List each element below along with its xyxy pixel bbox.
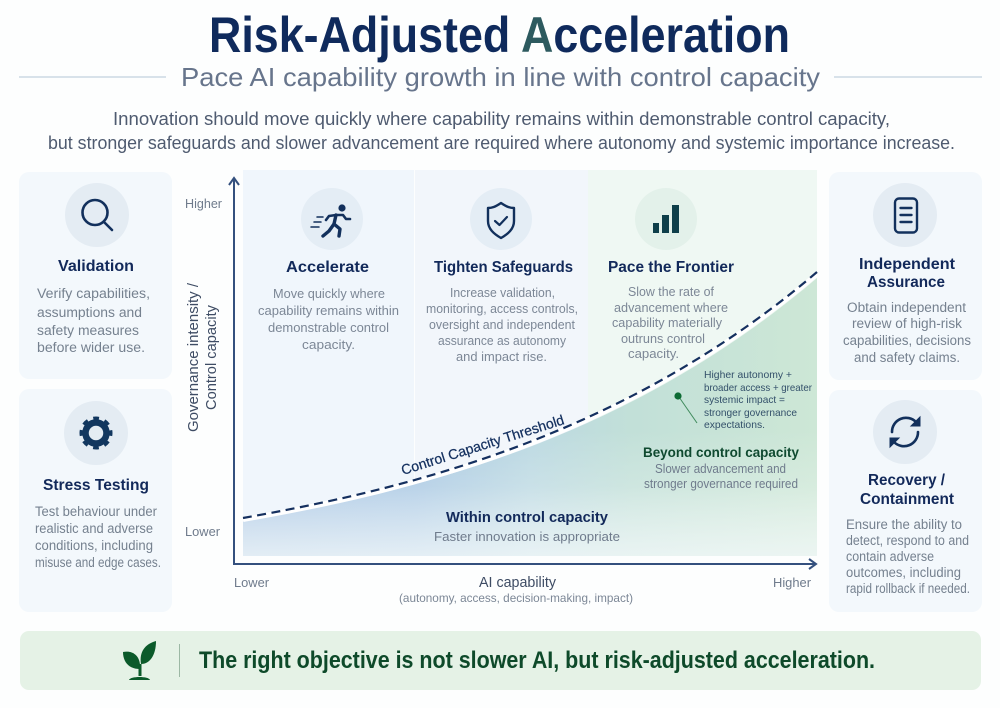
- heading: recovery / containment: [860, 472, 955, 508]
- label: within control capacity: Faster innovation is appropriate: [434, 530, 620, 544]
- text: stress testing body: conditions, including: [35, 538, 153, 553]
- heading: accelerate: Accelerate: [286, 259, 369, 276]
- callout: stronger governance: stronger governance: [704, 407, 797, 419]
- x axis labels: Lower: [234, 576, 269, 590]
- text: independent assurance body: [843, 300, 971, 365]
- x axis labels: [234, 576, 811, 590]
- heading: pace the frontier: Pace the Frontier: [608, 259, 734, 276]
- text: tighten safeguards body: oversight and independent: [429, 317, 575, 332]
- area under threshold: [243, 278, 817, 556]
- chart: control capacity threshold: [185, 170, 817, 605]
- threshold curve: [243, 272, 817, 520]
- subtitle: Pace AI capability growth in line with control capacity: [181, 62, 820, 92]
- heading: recovery / containment: Containment: [860, 491, 955, 508]
- x axis labels: Higher: [773, 576, 811, 590]
- text: independent assurance body: Obtain independent: [847, 300, 966, 315]
- text: accelerate body: capacity.: [302, 337, 355, 352]
- icon: refresh: [890, 417, 920, 447]
- label: beyond control capacity: Slower advancement and: [655, 462, 786, 476]
- callout: stronger governance: broader access + greater: [704, 382, 812, 394]
- label: beyond control capacity: Beyond control capacity: [643, 444, 799, 460]
- text: stress testing body: misuse and edge cases.: [35, 555, 161, 570]
- panel: independent assurance: [829, 172, 982, 380]
- zone: accelerate: [258, 188, 399, 352]
- text: validation body: Verify capabilities,: [37, 286, 150, 301]
- zone: pace the frontier: [608, 188, 734, 361]
- heading: independent assurance: Assurance: [867, 274, 945, 291]
- text: accelerate body: capability remains within: [258, 303, 399, 318]
- y axis: [229, 178, 239, 564]
- text: independent assurance body: and safety claims.: [854, 350, 960, 365]
- heading: validation: Validation: [58, 258, 134, 275]
- intro text: but stronger safeguards and slower advancement are required where autonomy and systemic importance increase.: [48, 133, 955, 153]
- text: accelerate body: demonstrable control: [268, 320, 389, 335]
- y axis title: Governance intensity /: [186, 282, 202, 432]
- text: validation body: [37, 286, 150, 355]
- text: tighten safeguards body: Increase validation,: [450, 285, 555, 300]
- label: within control capacity: Within control capacity: [446, 510, 608, 526]
- callout: stronger governance: [674, 369, 812, 431]
- x axis title: AI capability: [479, 575, 557, 591]
- text: stress testing body: [35, 504, 161, 570]
- title: Risk-Adjusted Acceleration: [209, 7, 790, 63]
- intro text: [48, 109, 955, 153]
- text: pace the frontier body: capability materially: [612, 315, 722, 330]
- text: pace the frontier body: advancement where: [614, 300, 728, 315]
- text: recovery body: [846, 517, 970, 596]
- text: tighten safeguards body: [426, 285, 578, 364]
- text: stress testing body: realistic and adverse: [35, 521, 153, 536]
- icon: runner: [311, 204, 350, 236]
- text: stress testing body: Test behaviour under: [35, 504, 157, 519]
- x axis title: [399, 575, 633, 605]
- text: independent assurance body: capabilities, decisions: [843, 333, 971, 348]
- panel: recovery / containment: [829, 390, 982, 612]
- panel: zone backgrounds: [243, 170, 817, 556]
- text: pace the frontier body: outruns control: [621, 331, 705, 346]
- icon: bars: [653, 205, 679, 233]
- icon: document: [895, 198, 917, 232]
- banner: conclusion: [20, 631, 981, 690]
- icon: shield: [488, 203, 514, 238]
- heading: independent assurance: [859, 256, 956, 291]
- text: pace the frontier body: Slow the rate of: [628, 284, 714, 299]
- text: recovery body: rapid rollback if needed.: [846, 581, 970, 596]
- text: recovery body: outcomes, including: [846, 565, 961, 580]
- label: beyond control capacity: stronger governance required: [644, 477, 798, 491]
- heading: independent assurance: Independent: [859, 256, 956, 273]
- text: independent assurance body: review of high-risk: [852, 316, 962, 331]
- text: recovery body: Ensure the ability to: [846, 517, 962, 532]
- y axis labels: [185, 197, 222, 539]
- text: validation body: before wider use.: [37, 340, 145, 355]
- icon: seedling: [123, 641, 156, 680]
- icon: gear: [82, 418, 110, 448]
- heading: tighten safeguards: Tighten Safeguards: [434, 259, 573, 276]
- text: conclusion: The right objective is not slower AI, but risk-adjusted acceleration.: [199, 647, 875, 674]
- zone: tighten safeguards: [426, 188, 578, 364]
- text: tighten safeguards body: assurance as autonomy: [438, 333, 566, 348]
- text: pace the frontier body: capacity.: [628, 346, 679, 361]
- text: recovery body: contain adverse: [846, 549, 934, 564]
- callout: stronger governance: systemic impact =: [704, 394, 785, 406]
- text: validation body: safety measures: [37, 323, 139, 338]
- y axis labels: Higher: [185, 197, 222, 211]
- threshold label: Control Capacity Threshold: [399, 411, 566, 478]
- intro text: Innovation should move quickly where capability remains within demonstrable control capacity,: [113, 109, 890, 129]
- y axis labels: Lower: [185, 525, 220, 539]
- text: pace the frontier body: [612, 284, 728, 361]
- callout: stronger governance: Higher autonomy +: [704, 369, 792, 381]
- label: within control capacity: [434, 510, 620, 544]
- label: beyond control capacity: [643, 444, 799, 491]
- text: accelerate body: [258, 286, 399, 352]
- text: validation body: assumptions and: [37, 305, 142, 320]
- text: tighten safeguards body: and impact rise.: [456, 349, 547, 364]
- panel: validation: [19, 172, 172, 379]
- text: accelerate body: Move quickly where: [273, 286, 385, 301]
- heading: recovery / containment: Recovery /: [868, 472, 946, 489]
- text: recovery body: detect, respond to and: [846, 533, 969, 548]
- icon: magnifier: [82, 200, 112, 230]
- x axis title: (autonomy, access, decision-making, impact): [399, 591, 633, 605]
- y axis title: Control capacity: [204, 304, 220, 410]
- callout: stronger governance: expectations.: [704, 419, 765, 431]
- x axis: [233, 559, 816, 569]
- panel: stress testing: [19, 389, 172, 612]
- heading: stress testing: Stress Testing: [43, 477, 149, 494]
- y axis title: [186, 282, 220, 432]
- text: tighten safeguards body: monitoring, access controls,: [426, 301, 578, 316]
